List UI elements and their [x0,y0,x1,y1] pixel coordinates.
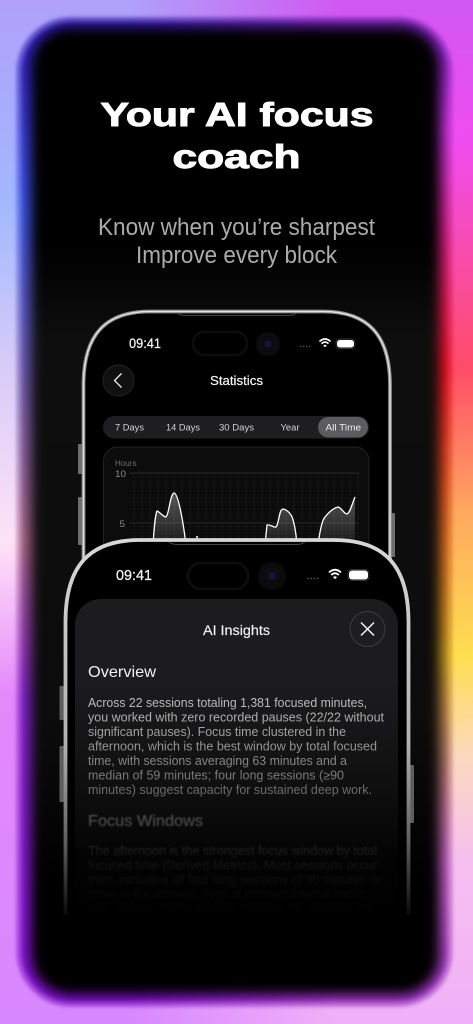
focus windows body text: was around 59–63 minutes (median 59, average 63) [87,902,375,916]
time range segmented control: All Time [326,422,361,434]
time range segmented control: 7 Days [115,422,144,434]
hours line chart [153,493,355,545]
sheet title: AI Insights [203,623,270,638]
overview body text: median of 59 minutes; four long sessions (≥90 [88,768,344,782]
overview body text: Across 22 sessions totaling 1,381 focused minutes, [88,696,367,710]
focus windows body text: more in the dataset. Typical uninterrupted duration [88,888,367,902]
overview body text: you worked with zero recorded pauses (22/22 without [88,710,385,724]
phone 1 dynamic island [193,332,280,356]
chart axis labels: 5 [120,519,125,530]
subtitle [98,214,375,269]
time range segmented control: 30 Days [219,422,254,434]
focus windows section [87,813,381,916]
overview heading: Overview [88,664,156,681]
overview body text: minutes) suggest capacity for sustained deep work. [88,783,372,797]
focus windows body text: The afternoon is the strongest focus window by total [88,844,377,858]
focus windows body text: focused time (Derived Metrics). Most sessions occur [88,858,377,872]
phone 2 status icons [307,570,369,580]
title: Your AI focus [100,97,374,134]
overview body text: significant pauses). Focus time clustered in the [88,725,346,739]
phone 1 status icons [300,339,355,348]
overview body text [88,696,385,797]
overview body text: time, with sessions averaging 63 minutes and a [88,754,347,768]
close button [350,612,385,646]
phone 1 frame [84,312,390,620]
focus windows body text: then, including all four long sessions of 90 minutes or [88,873,381,887]
chart axis labels: Hours [115,459,136,468]
phone 1 status bar time: 09:41 [129,336,161,351]
title: coach [172,139,300,176]
phone 2 status bar time: 09:41 [116,568,152,584]
phone 1 side buttons [78,444,395,557]
overview body text: afternoon, which is the best window by total focused [88,740,377,754]
chart card [103,446,370,544]
phone: AI insights screen (front) [60,540,414,945]
statistics heading: Statistics [210,374,263,388]
back button [103,365,134,396]
bottom fade over sheet [70,680,404,945]
phone 2 dynamic island [188,562,286,590]
subtitle: Know when you’re sharpest [98,214,375,241]
phone: statistics screen (back) [78,310,395,560]
insights sheet [75,599,398,939]
title [100,97,374,176]
phone 2 side buttons [60,686,414,823]
phone 2 frame [66,540,408,915]
chart grid [130,473,359,545]
focus windows heading: Focus Windows [88,813,203,830]
chart axis labels [115,459,136,530]
chart axis labels: 10 [115,469,126,480]
subtitle: Improve every block [136,242,338,269]
time range segmented control: Year [280,422,300,434]
time range segmented control [103,416,369,438]
time range segmented control: 14 Days [166,422,200,434]
focus windows body text [87,844,381,916]
